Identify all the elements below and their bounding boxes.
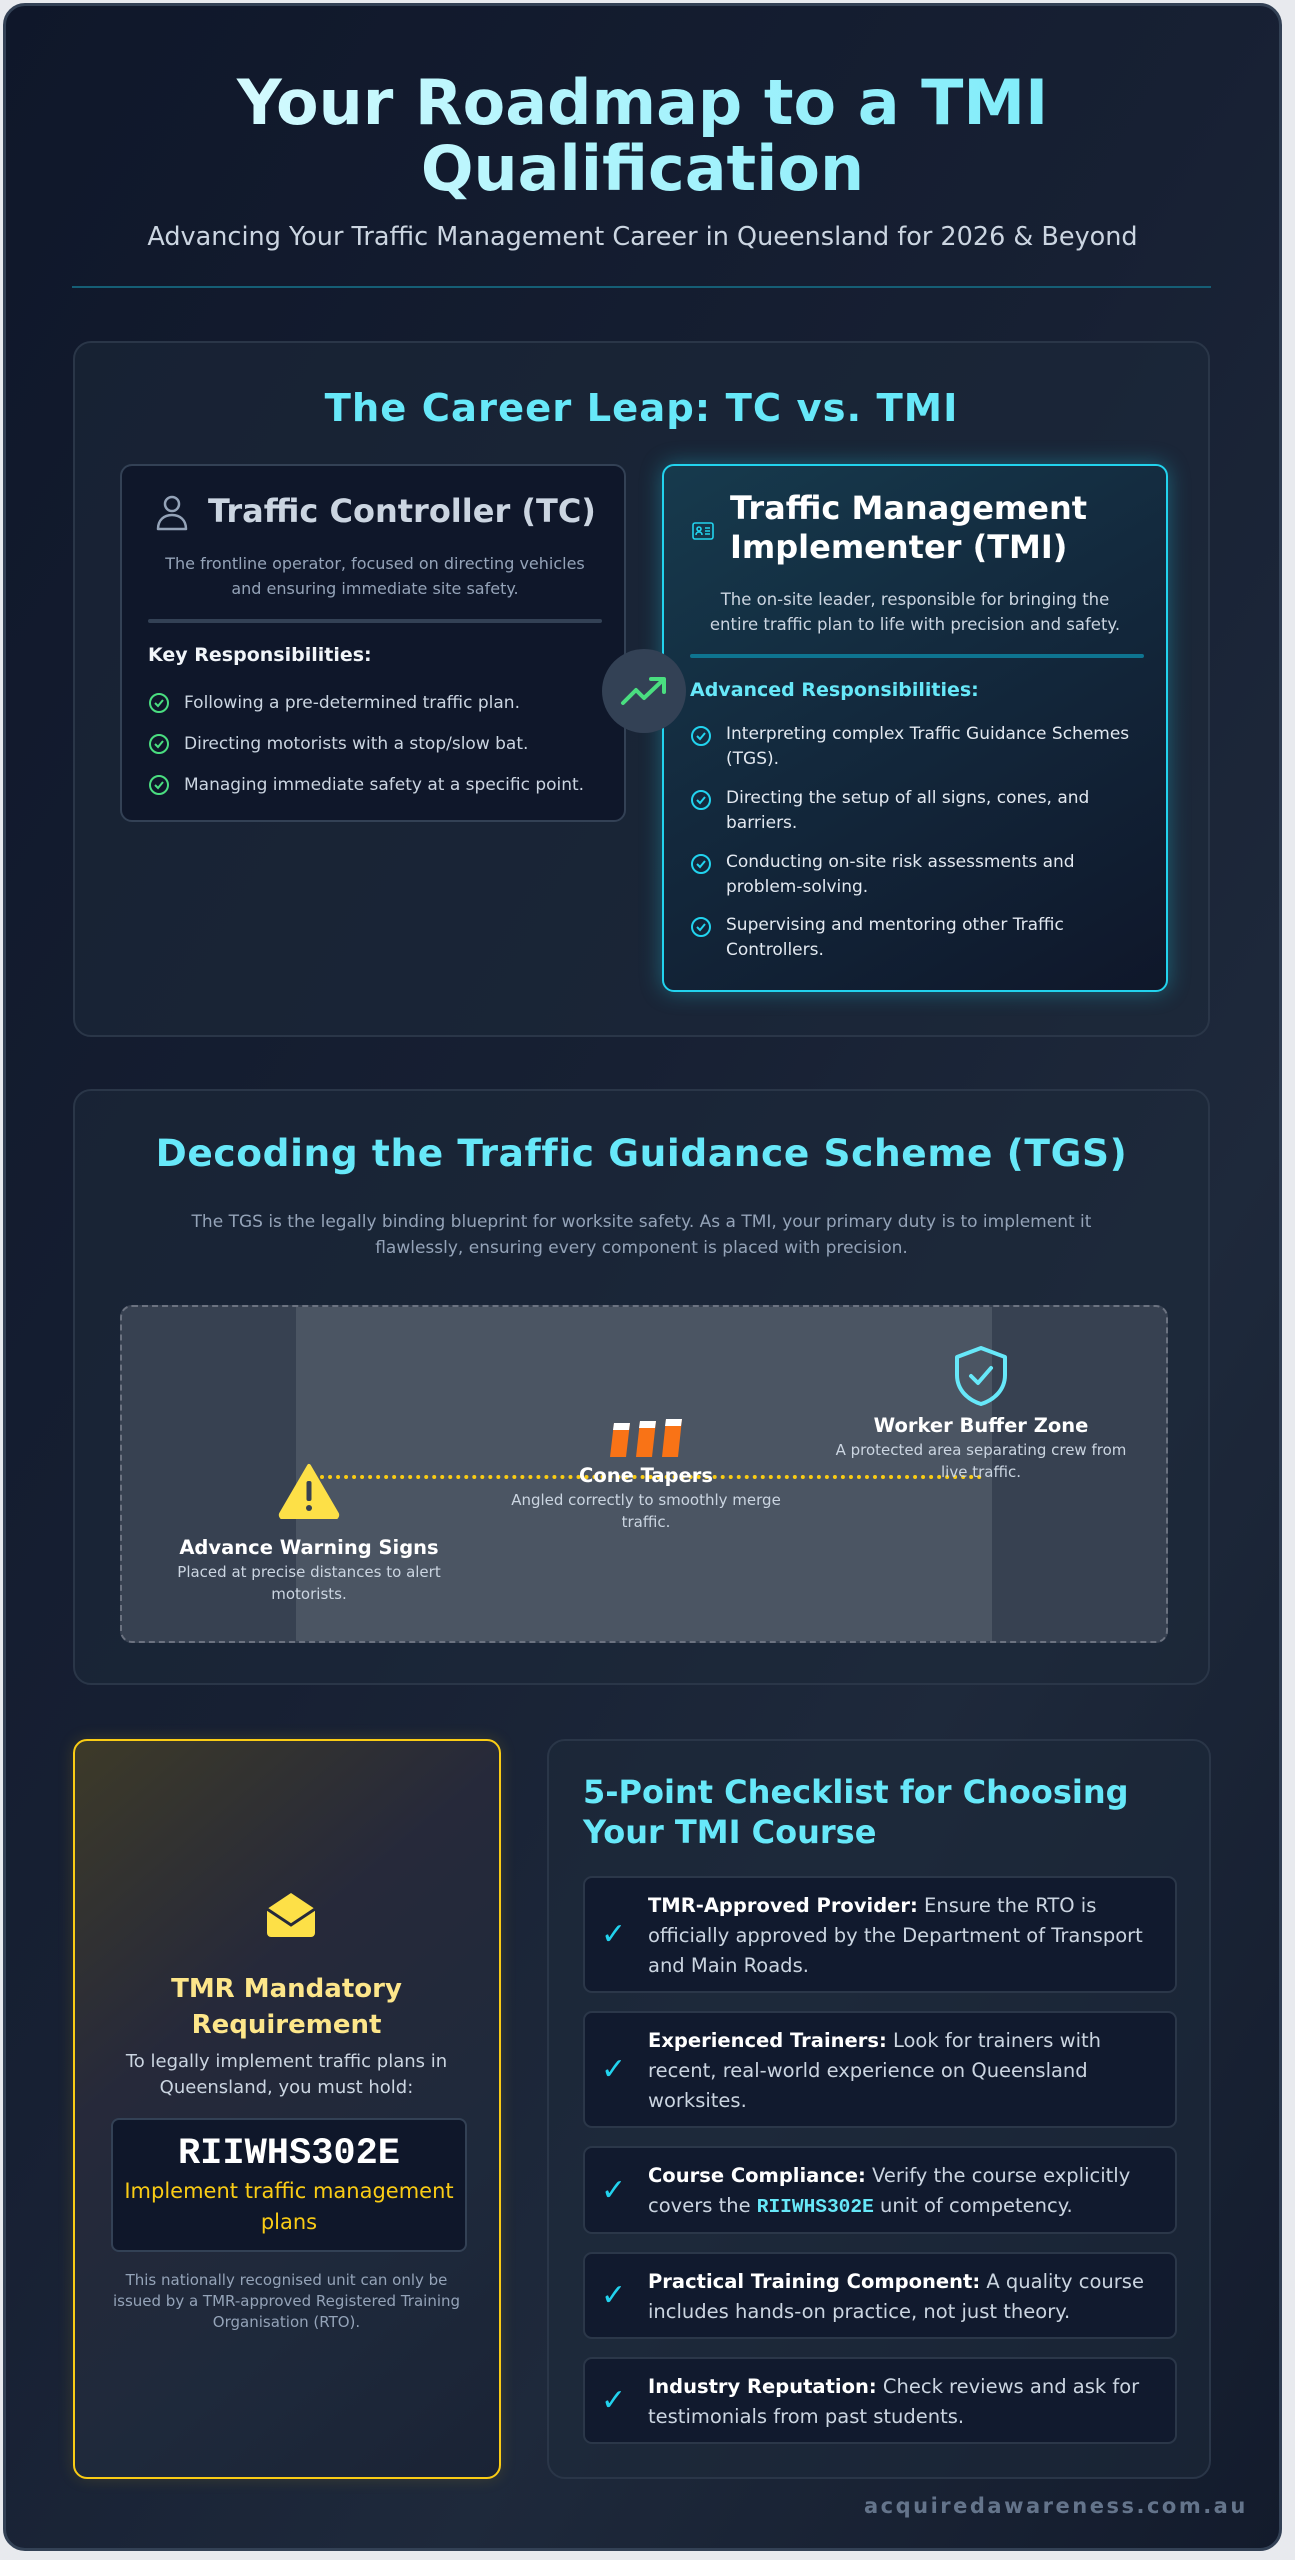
list: TMI responsibilities: Conducting on-site risk assessments and problem-solving. bbox=[726, 852, 1075, 897]
item: cone tapers: Angled correctly to smoothly merge traffic. bbox=[511, 1491, 781, 1531]
heading: checklist: 5-Point Checklist for Choosing bbox=[583, 1773, 1129, 1811]
panel: TMR mandatory requirement bbox=[73, 1739, 501, 2479]
list: TC responsibilities: Managing immediate safety at a specific point. bbox=[184, 774, 584, 794]
item: industry reputation: ✓ bbox=[601, 2383, 626, 2418]
code box: RIIWHS302E: RIIWHS302E bbox=[178, 2133, 400, 2175]
title: Qualification bbox=[421, 132, 864, 205]
heading: advanced responsibilities: Advanced Responsibilities: bbox=[690, 679, 979, 701]
item: practical training: Practical Training Component: A quality course includes hands-on practice, not just theory. bbox=[648, 2270, 1144, 2323]
list: TC responsibilities bbox=[149, 692, 584, 795]
card: traffic management implementer bbox=[662, 464, 1168, 992]
item: worker buffer zone bbox=[836, 1346, 1126, 1481]
footer: website: acquiredawareness.com.au bbox=[864, 2494, 1248, 2518]
icon: trending arrow bbox=[602, 649, 686, 733]
code box: RIIWHS302E: Implement traffic management plans bbox=[124, 2179, 454, 2234]
item: cone tapers: Cone Tapers bbox=[579, 1464, 713, 1487]
list: TMI responsibilities: Supervising and mentoring other Traffic Controllers. bbox=[726, 915, 1064, 960]
item: experienced trainers bbox=[583, 2011, 1177, 2128]
item: cone tapers bbox=[511, 1419, 781, 1531]
item: worker buffer zone: Worker Buffer Zone bbox=[874, 1414, 1088, 1437]
item: TMR-approved provider bbox=[583, 1876, 1177, 1993]
list: TMI responsibilities: Interpreting complex Traffic Guidance Schemes (TGS). bbox=[726, 724, 1129, 769]
heading: TMR mandatory: TMR Mandatory bbox=[171, 1974, 402, 2004]
item: course compliance bbox=[583, 2146, 1177, 2234]
icon: id card bbox=[692, 522, 714, 540]
heading: TMI: Traffic Management bbox=[730, 489, 1087, 527]
item: advance warning signs: Advance Warning Signs bbox=[179, 1536, 439, 1559]
icon: person bbox=[156, 496, 188, 530]
heading: TC: Traffic Controller (TC) bbox=[208, 492, 596, 530]
item: experienced trainers: ✓ bbox=[601, 2052, 626, 2087]
heading: TGS: Decoding the Traffic Guidance Scheme (TGS) bbox=[156, 1131, 1127, 1175]
item: TMR-approved provider: ✓ bbox=[601, 1917, 626, 1952]
text: footnote: This nationally recognised unit can only be issued by a TMR-approved Registered Training Organisation (RTO). bbox=[113, 2271, 460, 2331]
heading: TMR mandatory: Requirement bbox=[192, 2010, 381, 2040]
item: practical training bbox=[583, 2252, 1177, 2339]
text: TGS intro: The TGS is the legally binding blueprint for worksite safety. As a TMI, your primary duty is to implement it flawlessly, ensuring every component is placed with precision. bbox=[192, 1212, 1091, 1258]
panel: TGS bbox=[73, 1089, 1210, 1685]
item: industry reputation: Industry Reputation: Check reviews and ask for testimonials from past students. bbox=[648, 2375, 1139, 2428]
item: course compliance: ✓ bbox=[601, 2173, 626, 2208]
panel: checklist bbox=[547, 1739, 1211, 2479]
heading: checklist: Your TMI Course bbox=[583, 1813, 876, 1851]
heading: TMI: Implementer (TMI) bbox=[730, 528, 1067, 566]
heading: checklist bbox=[582, 1773, 1129, 1851]
item: course compliance: Course Compliance: Verify the course explicitly covers the RIIWHS302E unit of competency. bbox=[648, 2164, 1130, 2218]
item: industry reputation bbox=[583, 2357, 1177, 2444]
list: TC responsibilities: Directing motorists with a stop/slow bat. bbox=[184, 734, 528, 754]
list: TMI responsibilities: Directing the setup of all signs, cones, and barriers. bbox=[726, 788, 1089, 833]
heading: TMI bbox=[730, 489, 1087, 566]
item: advance warning signs: Placed at precise distances to alert motorists. bbox=[177, 1563, 441, 1603]
item: worker buffer zone: A protected area separating crew from live traffic. bbox=[836, 1441, 1126, 1481]
heading: career leap: The Career Leap: TC vs. TMI bbox=[325, 386, 958, 431]
heading: TMR mandatory bbox=[171, 1974, 402, 2040]
item: practical training: ✓ bbox=[601, 2278, 626, 2313]
list: checklist items bbox=[583, 1876, 1177, 2444]
list: TMI responsibilities bbox=[691, 724, 1129, 960]
diagram: worksite layout bbox=[120, 1305, 1168, 1643]
icon: envelope bbox=[267, 1893, 315, 1937]
title bbox=[0, 70, 1285, 202]
title: Your Roadmap to a TMI bbox=[237, 66, 1048, 139]
card: traffic controller bbox=[120, 464, 626, 822]
heading: key responsibilities: Key Responsibilities: bbox=[148, 644, 372, 666]
item: TMR-approved provider: TMR-Approved Provider: Ensure the RTO is officially approved by the Department of Transport and Main Roads. bbox=[648, 1894, 1143, 1977]
panel: career leap bbox=[73, 341, 1210, 1037]
item: experienced trainers: Experienced Trainers: Look for trainers with recent, real-world experience on Queensland worksites. bbox=[648, 2029, 1101, 2112]
text: requirement intro: To legally implement traffic plans in Queensland, you must hold: bbox=[126, 2051, 447, 2098]
text: TMI description: The on-site leader, responsible for bringing the entire traffic plan to life with precision and safety. bbox=[710, 590, 1120, 634]
item: advance warning signs bbox=[177, 1464, 441, 1603]
subtitle: Advancing Your Traffic Management Career in Queensland for 2026 & Beyond bbox=[147, 222, 1138, 252]
text: TC description: The frontline operator, focused on directing vehicles and ensuring immediate site safety. bbox=[165, 554, 585, 598]
list: TC responsibilities: Following a pre-determined traffic plan. bbox=[184, 692, 520, 712]
code box: RIIWHS302E bbox=[111, 2118, 467, 2252]
